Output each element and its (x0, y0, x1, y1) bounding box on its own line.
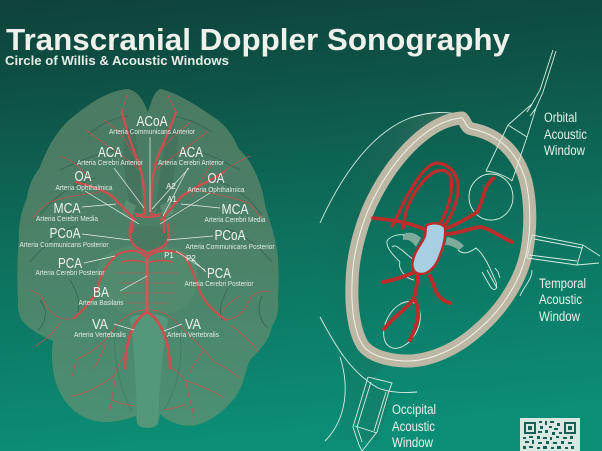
middle cerebral branches (33, 156, 262, 218)
probe: temporal (487, 235, 600, 288)
label: temporal window: Window (539, 309, 580, 324)
artery labels: Arteria Cerebri Anterior (77, 158, 143, 167)
artery labels: Arteria Basilaris (78, 298, 124, 307)
artery labels: Arteria Ophthalmica (188, 185, 245, 194)
label: temporal window (539, 276, 586, 324)
brainstem and midbrain (98, 200, 197, 428)
artery labels: BA (93, 284, 109, 301)
brain silhouette (17, 89, 279, 428)
artery labels: Arteria Cerebri Anterior (158, 158, 224, 167)
label: orbital window: Acoustic (544, 127, 587, 142)
ICA and communicating arteries (130, 214, 169, 254)
anterior cerebral arteries (122, 112, 176, 216)
artery labels: P2 (186, 254, 196, 263)
title: Transcranial Doppler Sonography (6, 22, 511, 57)
vertebral arteries (125, 312, 170, 368)
frontal groove (123, 128, 178, 212)
cerebellar branches (72, 310, 240, 418)
artery labels: Arteria Vertebralis (74, 330, 126, 339)
label: orbital window: Window (544, 143, 585, 158)
probe: occipital (353, 377, 392, 451)
basilar artery (146, 260, 148, 312)
third ventricle (412, 223, 445, 274)
posterior branches (30, 290, 270, 352)
artery labels: Arteria Cerebri Posterior (184, 279, 254, 288)
artery labels: ACA (179, 144, 203, 161)
artery labels: OA (208, 170, 224, 187)
skull ring (352, 118, 530, 361)
artery labels: A2 (166, 182, 176, 191)
artery labels: Arteria Ophthalmica (56, 183, 113, 192)
orbit circle (469, 174, 513, 220)
head soft tissue shading (320, 112, 462, 440)
artery labels: Arteria Cerebri Media (204, 215, 266, 224)
artery labels: ACA (98, 144, 122, 161)
posterior cerebral arteries (74, 251, 226, 320)
label: orbital window: Orbital (544, 110, 577, 125)
probe: orbital (486, 50, 556, 181)
artery labels: Arteria Cerebri Media (36, 214, 99, 223)
gyri folds (30, 116, 272, 330)
arteries: Circle of Willis (30, 94, 270, 418)
label: temporal window: Temporal (539, 276, 586, 291)
artery labels: Arteria Communicans Posterior (20, 240, 109, 249)
label: orbital window (544, 110, 587, 158)
cerebellum ellipse (376, 295, 428, 355)
panel: skull cross-section with acoustic windows (320, 50, 600, 451)
artery labels: Arteria Cerebri Posterior (36, 268, 105, 277)
artery labels: PCoA (50, 225, 80, 242)
artery labels: PCA (207, 265, 231, 282)
artery labels: Arteria Vertebralis (167, 330, 219, 339)
artery labels: Arteria Communicans Posterior (186, 242, 275, 251)
artery labels: MCA (222, 201, 248, 218)
QR code (520, 418, 580, 451)
artery labels: PCoA (214, 227, 246, 244)
artery labels: VA (185, 316, 201, 333)
artery labels: PCA (58, 255, 82, 272)
anterior branches (86, 94, 208, 170)
artery labels: Arteria Communicans Anterior (109, 127, 195, 136)
label: temporal window: Acoustic (539, 292, 582, 307)
artery labels: ACoA (136, 113, 168, 130)
artery labels: A1 (167, 195, 177, 204)
artery labels: VA (92, 316, 108, 333)
temporal lobe outlines (387, 233, 497, 289)
artery labels: MCA (54, 200, 80, 217)
label: occipital window: Occipital (392, 402, 436, 417)
head outline (320, 112, 532, 441)
pontine branches (116, 273, 178, 303)
arteries of circle of Willis (lateral) (373, 163, 512, 340)
label: occipital window (392, 402, 436, 450)
artery labels: OA (74, 168, 92, 185)
artery labels (20, 113, 275, 339)
subtitle: Circle of Willis & Acoustic Windows (5, 53, 229, 68)
leader lines (82, 137, 220, 331)
panel: brain anatomy (17, 89, 279, 428)
middle cerebral arteries (76, 172, 224, 220)
label: occipital window: Window (392, 435, 433, 450)
label: occipital window: Acoustic (392, 419, 435, 434)
artery labels: P1 (164, 251, 174, 260)
